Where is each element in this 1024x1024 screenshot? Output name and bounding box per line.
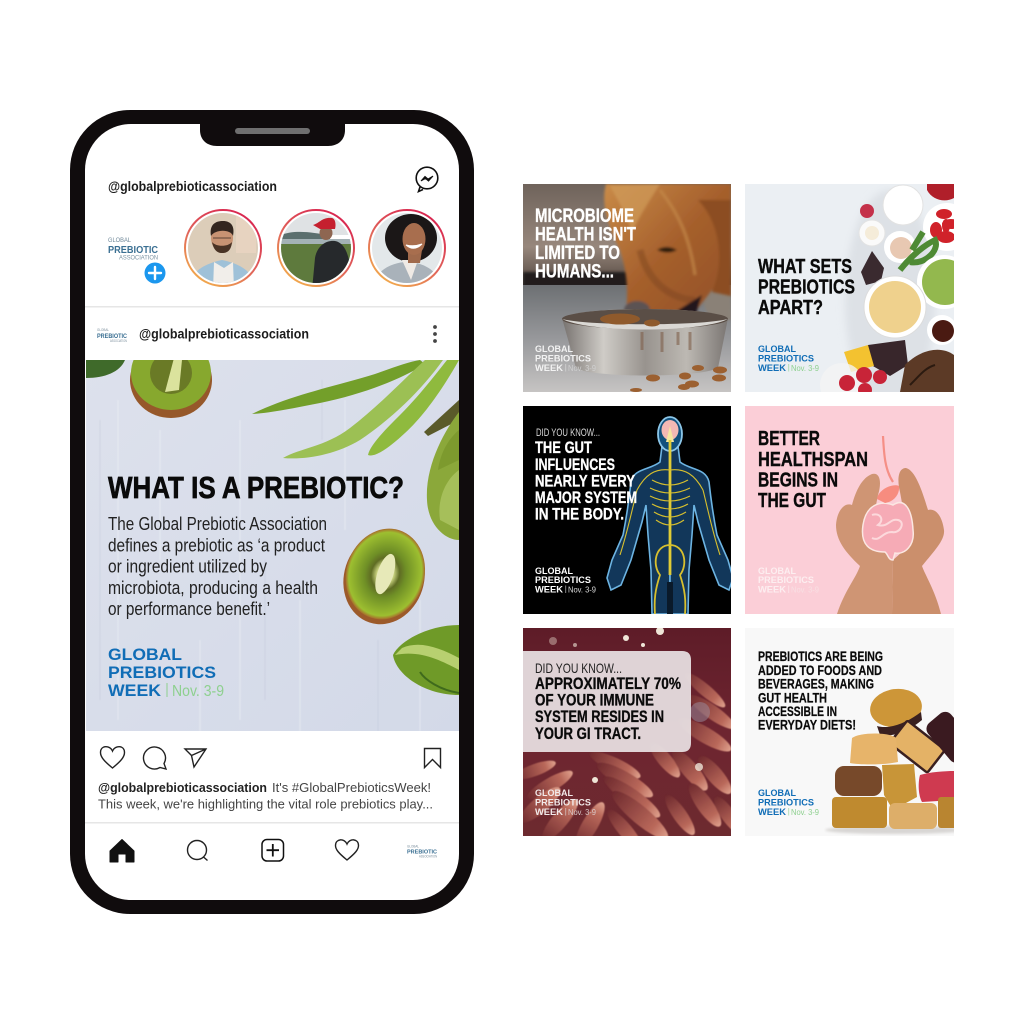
microscopic photo <box>523 628 731 836</box>
middle kiwi <box>343 528 425 624</box>
post body text: or performance benefit.’ <box>108 598 270 619</box>
tile heading: MAJOR SYSTEM <box>535 489 637 507</box>
tile heading <box>758 255 855 319</box>
tile logo: GLOBAL <box>758 343 796 354</box>
small logo <box>97 328 127 343</box>
notch speaker <box>235 128 310 134</box>
post photo <box>86 336 459 731</box>
hands holding gut <box>836 436 944 614</box>
phone screen <box>85 124 459 900</box>
panel: foods and beverages tile <box>758 651 954 836</box>
tile heading: HEALTH ISN'T <box>535 224 636 246</box>
tile heading: APART? <box>758 296 823 319</box>
story: man with glasses <box>185 210 261 290</box>
frosted text panel <box>523 651 691 752</box>
tile logo: WEEK <box>758 584 786 594</box>
tile logo <box>535 787 596 817</box>
post body text: defines a prebiotic as ‘a product <box>108 534 325 556</box>
post body text: The Global Prebiotic Association <box>108 513 327 534</box>
top-left leaf <box>86 360 125 378</box>
tile heading: HEALTHSPAN <box>758 448 868 471</box>
tile heading: BEVERAGES, MAKING <box>758 676 874 692</box>
tile logo <box>535 565 596 594</box>
tile logo <box>758 343 819 373</box>
dark bar <box>926 712 954 762</box>
more menu dots <box>433 325 437 343</box>
icon: comment <box>143 747 166 769</box>
tile heading <box>758 649 883 732</box>
divider <box>85 306 459 308</box>
tile heading: APPROXIMATELY 70% <box>535 675 681 693</box>
tile logo: Nov. 3-9 <box>791 807 819 817</box>
association logo with add button <box>108 237 166 284</box>
global prebiotics week logo <box>108 646 224 700</box>
small logo: ASSOCIATION <box>110 339 127 343</box>
tile heading: WHAT SETS <box>758 255 852 278</box>
phone notch <box>200 124 345 146</box>
tile heading: LIMITED TO <box>535 243 620 264</box>
tile heading: THE GUT <box>535 439 592 457</box>
caption: @globalprebioticassociation <box>98 780 267 795</box>
icon: add post <box>262 840 284 861</box>
snack bars photo <box>824 688 954 836</box>
tile logo: Nov. 3-9 <box>791 363 819 373</box>
profile handle: @globalprebioticassociation <box>108 179 277 194</box>
tilted cream bar <box>889 720 945 773</box>
tile logo <box>758 787 819 817</box>
profile logo: PREBIOTIC <box>407 850 438 856</box>
tile heading: MICROBIOME <box>535 206 634 227</box>
logo wordmark: PREBIOTIC <box>108 244 158 256</box>
lower cream bar <box>889 803 937 829</box>
phone mockup <box>70 110 474 914</box>
tile logo <box>535 343 596 373</box>
phone body <box>70 110 474 914</box>
caption: This week, we're highlighting the vital role prebiotics play... <box>98 796 433 812</box>
lower nut bar <box>832 797 887 828</box>
tile logo: Nov. 3-9 <box>568 584 596 594</box>
artichoke <box>424 400 459 540</box>
tile heading: ACCESSIBLE IN <box>758 704 837 719</box>
tile heading: SYSTEM RESIDES IN <box>535 708 664 726</box>
panel: what sets prebiotics apart tile <box>745 184 954 392</box>
tile heading: IN THE BODY. <box>535 506 624 524</box>
tile logo: GLOBAL <box>535 565 573 576</box>
did you know kicker: DID YOU KNOW... <box>536 427 600 439</box>
story: smiling woman <box>369 210 445 286</box>
panel: better healthspan tile <box>745 406 954 614</box>
add story button <box>144 262 166 284</box>
tile heading: BETTER <box>758 427 820 450</box>
caption: It's #GlobalPrebioticsWeek! <box>272 780 431 795</box>
tile logo: WEEK <box>535 806 563 817</box>
tile logo: GLOBAL <box>758 565 796 576</box>
logo wordmark <box>108 237 158 262</box>
icon: search <box>188 840 208 860</box>
global prebiotics week logo: PREBIOTICS <box>108 664 216 682</box>
tile logo: WEEK <box>535 584 563 594</box>
profile logo <box>407 844 438 858</box>
tile logo: WEEK <box>535 362 563 373</box>
brussels leaf <box>393 625 459 695</box>
tile logo: Nov. 3-9 <box>791 584 819 594</box>
post body text: microbiota, producing a health <box>108 577 318 598</box>
icon: messenger <box>416 167 438 192</box>
tile heading: PREBIOTICS ARE BEING <box>758 649 883 664</box>
tile logo: PREBIOTICS <box>758 574 814 585</box>
tile logo: PREBIOTICS <box>758 796 814 808</box>
top nut bar <box>870 688 922 736</box>
pink bar <box>919 771 954 802</box>
tile logo: GLOBAL <box>535 787 573 798</box>
tile logo: Nov. 3-9 <box>568 363 596 373</box>
panel: microbiome health dog tile <box>523 184 731 392</box>
small logo: PREBIOTIC <box>97 333 127 340</box>
tile heading: ADDED TO FOODS AND <box>758 663 882 678</box>
global prebiotics week logo: Nov. 3-9 <box>172 683 224 700</box>
tile heading <box>758 427 868 512</box>
post heading: WHAT IS A PREBIOTIC? <box>108 471 404 505</box>
nut slice <box>882 764 917 810</box>
icon: like heart <box>100 747 124 768</box>
post body text <box>108 513 327 619</box>
tile heading <box>535 206 636 282</box>
post image: what is a prebiotic <box>86 336 459 731</box>
logo wordmark: ASSOCIATION <box>119 254 158 262</box>
caption <box>98 780 433 812</box>
anatomy figure <box>607 417 733 614</box>
action bar icons <box>100 747 440 769</box>
tile logo: PREBIOTICS <box>535 574 591 585</box>
tile heading: GUT HEALTH <box>758 690 827 706</box>
tile logo: Nov. 3-9 <box>568 807 596 817</box>
tile heading: HUMANS... <box>535 262 614 282</box>
icon: bookmark <box>424 748 440 768</box>
icon: activity heart <box>336 840 358 860</box>
icon: home <box>110 840 134 862</box>
panel: immune system tile <box>523 628 731 836</box>
tile logo: WEEK <box>758 806 786 817</box>
logo wordmark: GLOBAL <box>108 237 131 244</box>
black background <box>523 406 731 614</box>
tile heading <box>535 675 681 743</box>
dog photo <box>523 184 731 392</box>
icon: share <box>185 749 206 767</box>
did you know kicker: DID YOU KNOW... <box>535 660 622 676</box>
tile heading: EVERYDAY DIETS! <box>758 718 856 732</box>
tile logo: GLOBAL <box>535 343 573 354</box>
tile heading: OF YOUR IMMUNE <box>535 692 654 710</box>
top kiwi <box>130 360 212 418</box>
profile logo: ASSOCIATION <box>419 854 438 858</box>
tile heading: PREBIOTICS <box>758 276 855 298</box>
post body text: or ingredient utilized by <box>108 556 268 576</box>
tile heading: INFLUENCES <box>535 456 615 474</box>
panel: gut influences nervous system tile <box>523 406 733 614</box>
bottom navigation <box>110 840 438 862</box>
global prebiotics week logo: GLOBAL <box>108 646 182 664</box>
tile logo: PREBIOTICS <box>758 352 814 364</box>
tile logo: PREBIOTICS <box>535 352 591 364</box>
tile heading: THE GUT <box>758 489 826 512</box>
post header <box>97 325 437 343</box>
tile logo <box>758 565 819 594</box>
global prebiotics week logo: WEEK <box>108 682 161 700</box>
right nut bar <box>938 797 954 828</box>
tile heading: YOUR GI TRACT. <box>535 725 641 743</box>
tile logo: PREBIOTICS <box>535 796 591 808</box>
pink background <box>745 406 954 614</box>
profile logo: GLOBAL <box>407 844 419 848</box>
chocolate bar <box>835 766 882 796</box>
post handle: @globalprebioticassociation <box>139 326 309 342</box>
tile logo: WEEK <box>758 362 786 373</box>
tile heading: NEARLY EVERY <box>535 472 635 490</box>
bean pods <box>252 360 459 458</box>
divider <box>85 822 459 824</box>
tile heading: BEGINS IN <box>758 468 838 492</box>
small logo: GLOBAL <box>97 328 109 332</box>
story: man in red cap <box>278 210 354 290</box>
cut cream bar <box>850 734 898 764</box>
food photo <box>745 184 954 392</box>
tile logo: GLOBAL <box>758 787 796 798</box>
tile heading <box>535 439 637 524</box>
